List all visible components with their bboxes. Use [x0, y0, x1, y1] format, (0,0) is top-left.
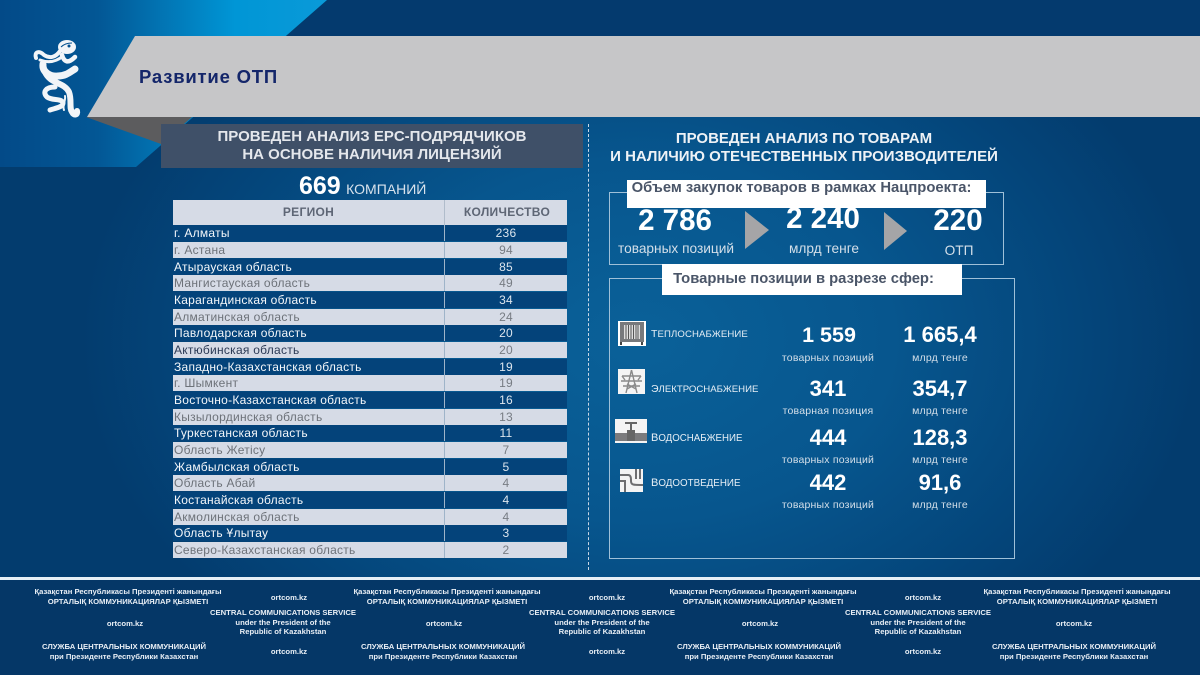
text: 236	[496, 226, 516, 240]
text: Восточно-Казахстанская область	[174, 393, 366, 407]
text: Актюбинская область	[174, 343, 299, 357]
caption: water positions: товарных позиций	[782, 454, 874, 466]
title: Развитие ОТП	[139, 66, 278, 87]
header banner graphics	[0, 0, 1200, 167]
footer text: при Президенте Республики Казахстан	[685, 652, 833, 660]
caption: power positions: товарная позиция	[783, 405, 873, 417]
text: 34	[499, 293, 513, 307]
text: г. Астана	[174, 243, 225, 257]
heading: goods analysis: И НАЛИЧИЮ ОТЕЧЕСТВЕННЫХ ПРОИЗВОДИТЕЛЕЙ	[610, 148, 998, 165]
footer text: under the President of the	[870, 618, 966, 626]
text: Западно-Казахстанская область	[174, 360, 362, 374]
caption: power billion: млрд тенге	[912, 405, 968, 417]
footer text: CENTRAL COMMUNICATIONS SERVICE	[210, 608, 356, 617]
text: 3	[503, 526, 509, 540]
footer text: ОРТАЛЫҚ КОММУНИКАЦИЯЛАР ҚЫЗМЕТІ	[683, 596, 843, 606]
panel: EPC contractors heading: ПРОВЕДЕН АНАЛИЗ EPC-ПОДРЯДЧИКОВ	[218, 128, 526, 145]
footer text: Republic of Kazakhstan	[875, 627, 961, 636]
label: procurement volume: Объем закупок товаров в рамках Нацпроекта:	[632, 180, 971, 196]
text: 5	[503, 460, 509, 474]
sphere label: water disposal: ВОДООТВЕДЕНИЕ	[651, 477, 740, 489]
sphere label: power supply: ЭЛЕКТРОСНАБЖЕНИЕ	[651, 383, 758, 395]
heading: goods analysis	[610, 130, 998, 165]
icon: logo snow leopard	[34, 40, 80, 118]
stat: positions: 2 786	[638, 204, 712, 237]
text: 85	[499, 260, 513, 274]
footer text: при Президенте Республики Казахстан	[50, 652, 198, 660]
text: 20	[499, 326, 513, 340]
footer text: СЛУЖБА ЦЕНТРАЛЬНЫХ КОММУНИКАЦИЙ	[677, 642, 841, 651]
sphere label: heat supply: ТЕПЛОСНАБЖЕНИЕ	[651, 328, 748, 340]
footer text: ortcom.kz	[742, 619, 778, 628]
value: disposal billion: 91,6	[919, 470, 961, 495]
footer text: Қазақстан Республикасы Президенті жанындағы	[353, 587, 541, 596]
text: Северо-Казахстанская область	[174, 543, 356, 557]
text: Жамбылская область	[174, 460, 300, 474]
footer text: СЛУЖБА ЦЕНТРАЛЬНЫХ КОММУНИКАЦИЙ	[992, 642, 1156, 651]
label: spheres	[662, 264, 962, 295]
table header: КОЛИЧЕСТВО	[464, 205, 550, 219]
footer text: ortcom.kz	[426, 619, 462, 628]
table header	[173, 200, 567, 225]
text: 2	[503, 543, 509, 557]
caption: heat positions: товарных позиций	[782, 352, 874, 364]
caption: heat billion: млрд тенге	[912, 352, 968, 364]
footer text: ОРТАЛЫҚ КОММУНИКАЦИЯЛАР ҚЫЗМЕТІ	[367, 596, 527, 606]
text: 49	[499, 276, 513, 290]
footer text: Republic of Kazakhstan	[240, 627, 326, 636]
heading: goods analysis: ПРОВЕДЕН АНАЛИЗ ПО ТОВАРАМ	[676, 130, 932, 147]
arrow 1	[745, 211, 769, 249]
sphere label: water supply: ВОДОСНАБЖЕНИЕ	[651, 432, 742, 444]
text: 13	[499, 410, 513, 424]
stat caption: OTP: ОТП	[945, 243, 973, 258]
value: heat positions: 1 559	[802, 323, 856, 347]
footer text: ОРТАЛЫҚ КОММУНИКАЦИЯЛАР ҚЫЗМЕТІ	[997, 596, 1157, 606]
stat: billion tenge: 2 240	[786, 202, 860, 235]
panel: EPC contractors heading	[161, 124, 583, 168]
text: 19	[499, 360, 513, 374]
footer text: CENTRAL COMMUNICATIONS SERVICE	[529, 608, 675, 617]
footer text: Republic of Kazakhstan	[559, 627, 645, 636]
text: 4	[503, 493, 509, 507]
text: Мангистауская область	[174, 276, 310, 290]
stat caption: positions: товарных позиций	[618, 241, 734, 256]
text: 4	[503, 510, 509, 524]
text: 4	[503, 476, 509, 490]
footer text: CENTRAL COMMUNICATIONS SERVICE	[845, 608, 991, 617]
text: 24	[499, 310, 513, 324]
text: 20	[499, 343, 513, 357]
caption: water billion: млрд тенге	[912, 454, 968, 466]
arrow 2	[884, 212, 907, 250]
text: Область Абай	[174, 476, 256, 490]
text: Карагандинская область	[174, 293, 317, 307]
footer text: ortcom.kz	[271, 593, 307, 602]
footer text: Қазақстан Республикасы Президенті жанындағы	[669, 587, 857, 596]
footer text: при Президенте Республики Казахстан	[369, 652, 517, 660]
text: 19	[499, 376, 513, 390]
icon: heat supply	[618, 321, 646, 346]
icon: water disposal	[620, 469, 643, 492]
value: water positions: 444	[810, 425, 846, 450]
text: Алматинская область	[174, 310, 300, 324]
panel: spheres	[609, 278, 1015, 559]
label: spheres: Товарные позиции в разрезе сфер:	[673, 271, 934, 287]
footer text: ortcom.kz	[905, 647, 941, 656]
text: г. Алматы	[174, 226, 230, 240]
text: 7	[503, 443, 509, 457]
company count: 669 КОМПАНИЙ	[299, 172, 426, 200]
value: power billion: 354,7	[912, 376, 968, 401]
panel: procurement volume	[609, 192, 1004, 265]
label: procurement volume	[627, 180, 986, 208]
footer text: ortcom.kz	[589, 593, 625, 602]
footer text: Қазақстан Республикасы Президенті жанындағы	[34, 587, 222, 596]
footer	[0, 577, 1200, 675]
caption: disposal positions: товарных позиций	[782, 499, 874, 511]
footer text: СЛУЖБА ЦЕНТРАЛЬНЫХ КОММУНИКАЦИЙ	[361, 642, 525, 651]
text: Область Ұлытау	[174, 526, 268, 540]
value: power positions: 341	[810, 376, 846, 401]
footer text: ОРТАЛЫҚ КОММУНИКАЦИЯЛАР ҚЫЗМЕТІ	[48, 596, 208, 606]
value: disposal positions: 442	[810, 470, 846, 495]
footer text: ortcom.kz	[271, 647, 307, 656]
footer text: ortcom.kz	[107, 619, 143, 628]
table header: РЕГИОН	[283, 205, 334, 219]
text: 11	[500, 426, 512, 440]
icon: water supply	[615, 419, 647, 443]
text: 16	[499, 393, 513, 407]
footer text: under the President of the	[235, 618, 331, 626]
text: Туркестанская область	[174, 426, 308, 440]
caption: disposal billion: млрд тенге	[912, 499, 968, 511]
text: г. Шымкент	[174, 376, 238, 390]
stat: OTP count: 220	[933, 204, 983, 237]
text: 94	[499, 243, 513, 257]
footer text: СЛУЖБА ЦЕНТРАЛЬНЫХ КОММУНИКАЦИЙ	[42, 642, 206, 651]
text: Атырауская область	[174, 260, 292, 274]
icon: power supply	[618, 369, 645, 394]
text: Костанайская область	[174, 493, 303, 507]
footer text: under the President of the	[554, 618, 650, 626]
footer text: Қазақстан Республикасы Президенті жанындағы	[983, 587, 1171, 596]
panel: EPC contractors heading: НА ОСНОВЕ НАЛИЧИЯ ЛИЦЕНЗИЙ	[242, 146, 502, 163]
table of regions	[173, 200, 567, 225]
text: Павлодарская область	[174, 326, 307, 340]
footer text: ortcom.kz	[905, 593, 941, 602]
text: Акмолинская область	[174, 510, 300, 524]
footer text: ortcom.kz	[589, 647, 625, 656]
footer text: при Президенте Республики Казахстан	[1000, 652, 1148, 660]
footer text: ortcom.kz	[1056, 619, 1092, 628]
stat caption: billion tenge: млрд тенге	[789, 241, 859, 256]
value: water billion: 128,3	[912, 425, 968, 450]
text: Кызылординская область	[174, 410, 322, 424]
value: heat billion: 1 665,4	[903, 322, 977, 347]
text: Область Жетісу	[174, 443, 265, 457]
